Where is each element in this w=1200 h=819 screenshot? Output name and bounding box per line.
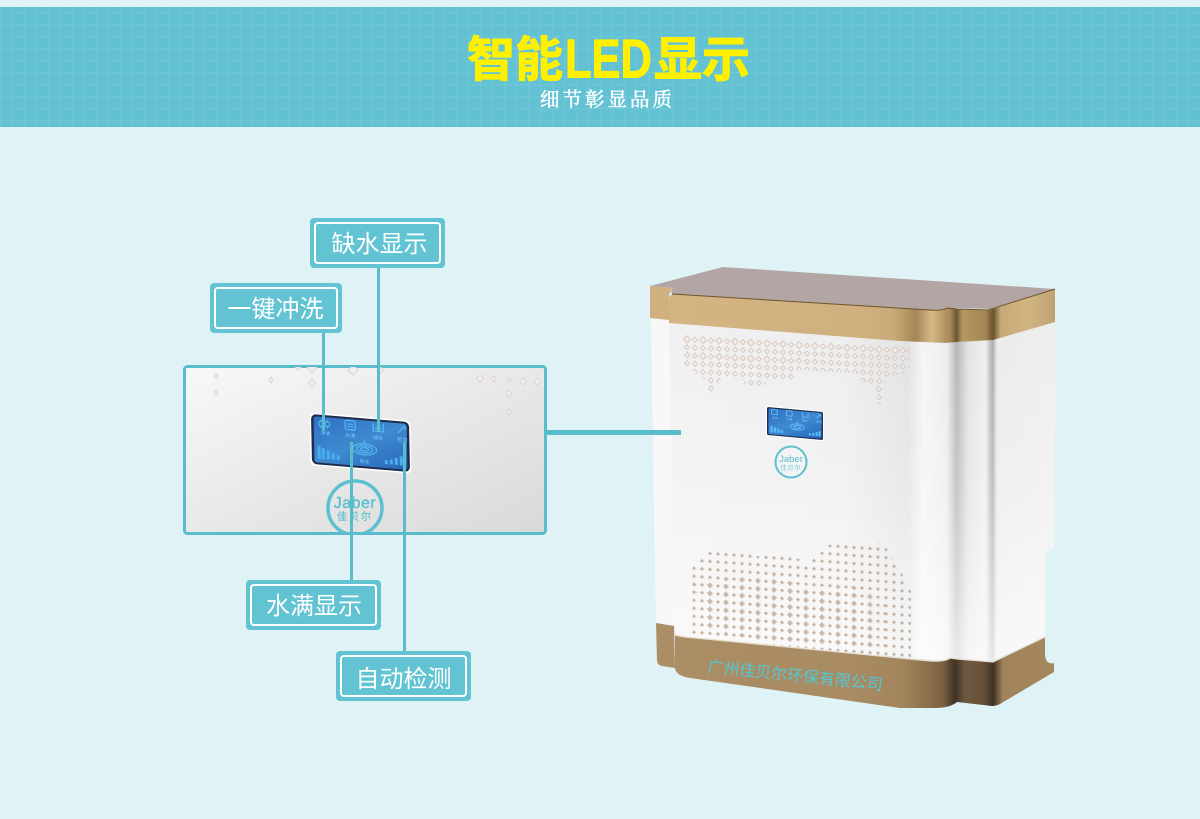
lid edge line <box>672 289 1055 310</box>
panel display screen: 检测 <box>397 436 407 444</box>
product top lid <box>650 267 1055 311</box>
panel: LED display close-up <box>184 363 546 535</box>
product top left gold trim <box>650 286 672 320</box>
panel display screen: 制水 <box>360 458 370 466</box>
product display screen <box>766 406 824 441</box>
lower dot pattern <box>690 542 911 662</box>
product logo: Jaber <box>779 454 803 465</box>
product white body <box>669 320 1055 662</box>
upper dot pattern <box>683 334 910 405</box>
product display screen: 缺水 <box>802 418 808 423</box>
connector: 一键冲洗 <box>322 333 325 431</box>
product display screen: 检测 <box>816 420 822 424</box>
base top highlight <box>675 635 1045 662</box>
product: water purifier <box>650 267 1055 708</box>
label: 缺水显示 <box>310 218 445 268</box>
label: 自动检测: 自动检测 <box>356 666 452 693</box>
title: LED <box>565 28 652 90</box>
panel display screen: 水满 <box>345 432 355 440</box>
connector: 自动检测 <box>403 442 406 651</box>
panel display screen <box>309 412 412 474</box>
label: 一键冲洗: 一键冲洗 <box>228 296 324 323</box>
label: 自动检测 <box>336 651 471 701</box>
panel display screen: 缺水 <box>373 434 383 442</box>
title <box>467 28 750 90</box>
product bottom left gold <box>656 623 675 668</box>
label: 一键冲洗 <box>210 283 342 333</box>
subtitle: 细节彰显品质 <box>540 88 675 111</box>
label: 缺水显示: 缺水显示 <box>332 231 428 258</box>
connector: 缺水显示 <box>377 268 380 431</box>
header band <box>0 7 1200 127</box>
title: 智能 <box>467 34 563 87</box>
product display screen: 冲洗 <box>772 416 778 420</box>
panel logo <box>328 481 382 535</box>
product top gold band <box>669 289 1055 343</box>
panel logo: 佳贝尔 <box>337 510 373 523</box>
product logo: 佳贝尔 <box>780 464 802 472</box>
company name: 广州佳贝尔环保有限公司 <box>707 658 884 694</box>
product left side panel <box>651 318 675 626</box>
product display screen: 水满 <box>786 417 792 421</box>
connector: 水满显示 <box>350 442 353 580</box>
label: 水满显示 <box>246 580 381 630</box>
panel logo: Jaber <box>334 495 376 512</box>
title: 显示 <box>654 34 750 87</box>
connector: panel to product <box>547 430 681 435</box>
product lower body highlight <box>669 320 1055 662</box>
product logo <box>776 446 806 478</box>
decorative diamonds on the panel <box>214 363 540 415</box>
panel display screen: 冲洗 <box>320 430 330 438</box>
label: 水满显示: 水满显示 <box>266 593 362 620</box>
product bottom gold base <box>675 635 1054 708</box>
